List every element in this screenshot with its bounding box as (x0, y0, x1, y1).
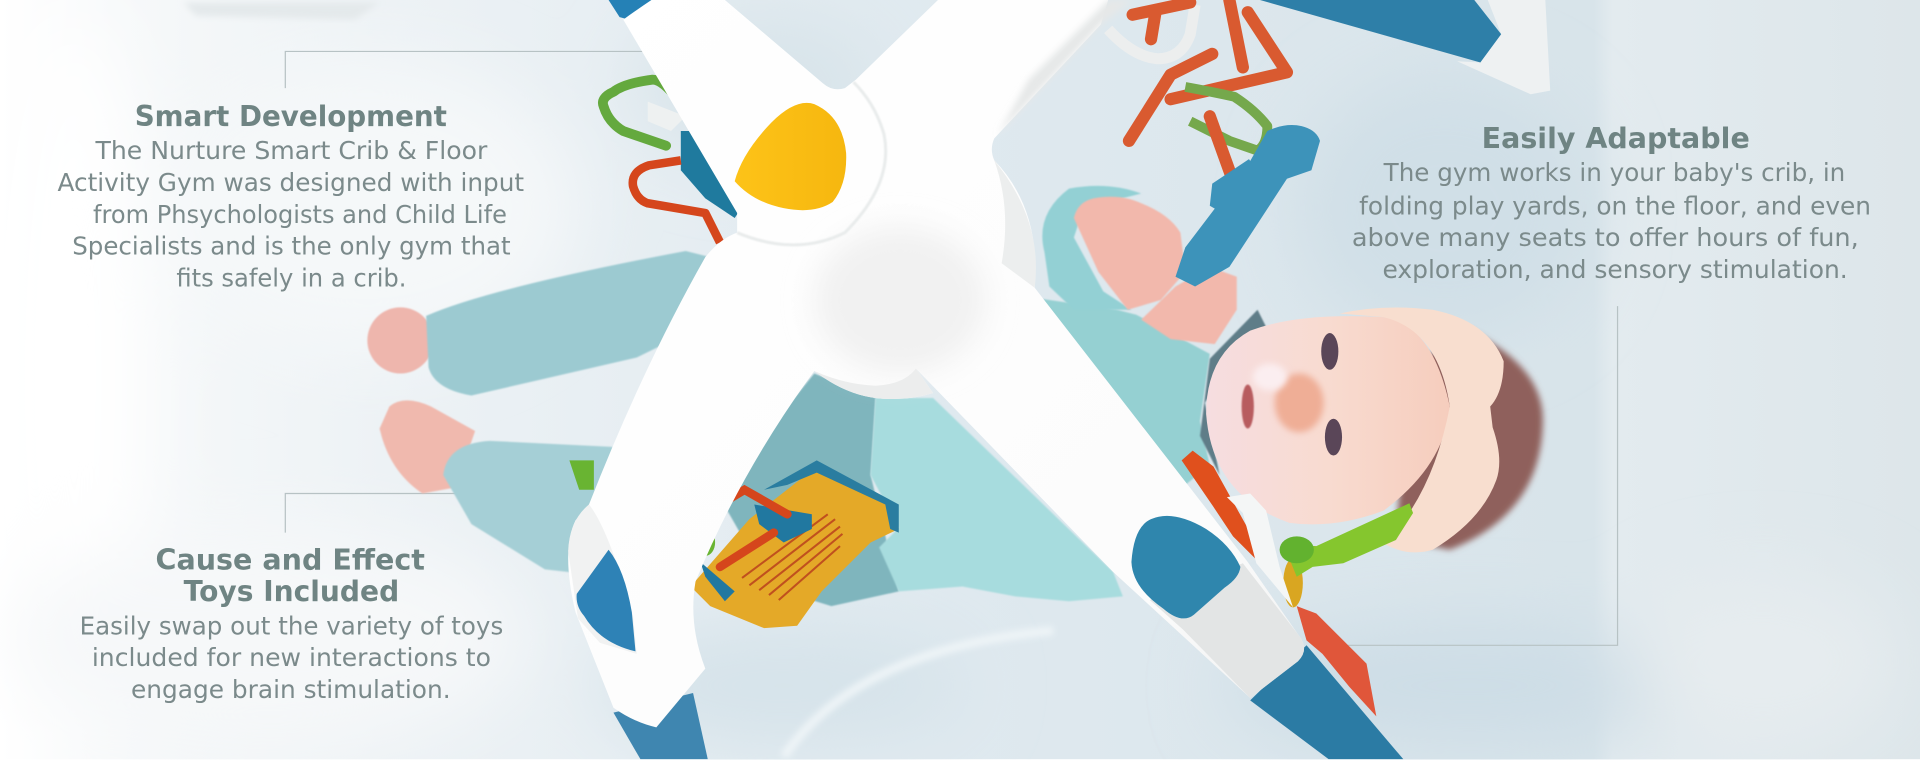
white clip (648, 102, 686, 131)
heart stripes (742, 514, 842, 600)
top arm shading (998, 0, 1133, 135)
blue handle toy (1176, 125, 1320, 287)
text: cause and effect (80, 543, 503, 704)
frame body (568, 0, 1304, 727)
hub lower shading (814, 227, 986, 373)
blue tubes (609, 0, 1501, 759)
frame foot top right (1457, 0, 1550, 94)
end cap left (568, 504, 637, 654)
text: cause and effect: Toys Included (184, 575, 399, 608)
text: smart development: Activity Gym was designed with input (58, 168, 524, 197)
orange toy lower (1182, 451, 1256, 560)
hanging ring (1108, 5, 1195, 59)
orange stem (1210, 116, 1243, 208)
blue small (700, 562, 735, 601)
trousers (722, 373, 899, 606)
headband (1340, 307, 1504, 552)
teal box (681, 131, 744, 218)
text: cause and effect: engage brain stimulation. (131, 675, 451, 704)
text: easily adaptable (1352, 122, 1871, 284)
toys foreground (1108, 0, 1413, 716)
blue end lower left (577, 550, 636, 651)
blue clip (754, 504, 812, 542)
white clip lower (1227, 493, 1293, 607)
blue border (764, 460, 899, 533)
green dot (696, 529, 715, 556)
text: smart development: Specialists and is the only gym that (72, 232, 511, 261)
text: smart development: from Phsychologists and Child Life (93, 200, 507, 229)
hair (1396, 331, 1543, 550)
text: easily adaptable: folding play yards, on the floor, and even (1359, 191, 1871, 220)
collar (1200, 310, 1267, 475)
text: easily adaptable: Easily Adaptable (1482, 122, 1750, 155)
text: easily adaptable: The gym works in your baby's crib, in (1383, 158, 1845, 187)
hub base under (814, 369, 933, 399)
hands (1074, 197, 1237, 344)
arm end shading (1150, 563, 1304, 698)
orange star toy (1129, 0, 1287, 141)
text: smart development (58, 100, 524, 293)
text: cause and effect: Easily swap out the variety of toys (80, 611, 503, 640)
green toy lower (1280, 503, 1413, 607)
face (1206, 316, 1450, 524)
baby legs and feet (367, 251, 735, 576)
eyes, nose and mouth (1242, 333, 1342, 456)
orange handle (633, 160, 720, 242)
yellow knob (735, 103, 846, 210)
toys behind frame (569, 80, 899, 628)
shirt (871, 398, 1123, 601)
hub disc edge (994, 160, 1036, 288)
text: cause and effect: included for new interactions to (92, 643, 491, 672)
yellow book toy (691, 470, 899, 628)
text: smart development: The Nurture Smart Crib & Floor (95, 136, 488, 165)
callout lines (285, 51, 1618, 645)
chest and lower arm (1032, 298, 1248, 562)
green toy ring (1185, 87, 1267, 151)
green ring toy (603, 80, 676, 146)
orange lattice (1297, 606, 1376, 716)
orange strings (720, 490, 787, 567)
upper sleeve (1042, 186, 1141, 310)
text: cause and effect: Cause and Effect (156, 543, 425, 576)
green bit at leg (569, 460, 594, 490)
blue end button lower right (1131, 516, 1240, 618)
baby (367, 186, 1543, 606)
text: easily adaptable: above many seats to offer hours of fun, (1352, 223, 1859, 252)
knob dish (737, 82, 886, 245)
text: smart development: Smart Development (135, 100, 447, 133)
text: easily adaptable: exploration, and sensory stimulation. (1382, 255, 1848, 284)
gym frame (568, 0, 1550, 759)
text: smart development: fits safely in a crib. (176, 264, 407, 293)
